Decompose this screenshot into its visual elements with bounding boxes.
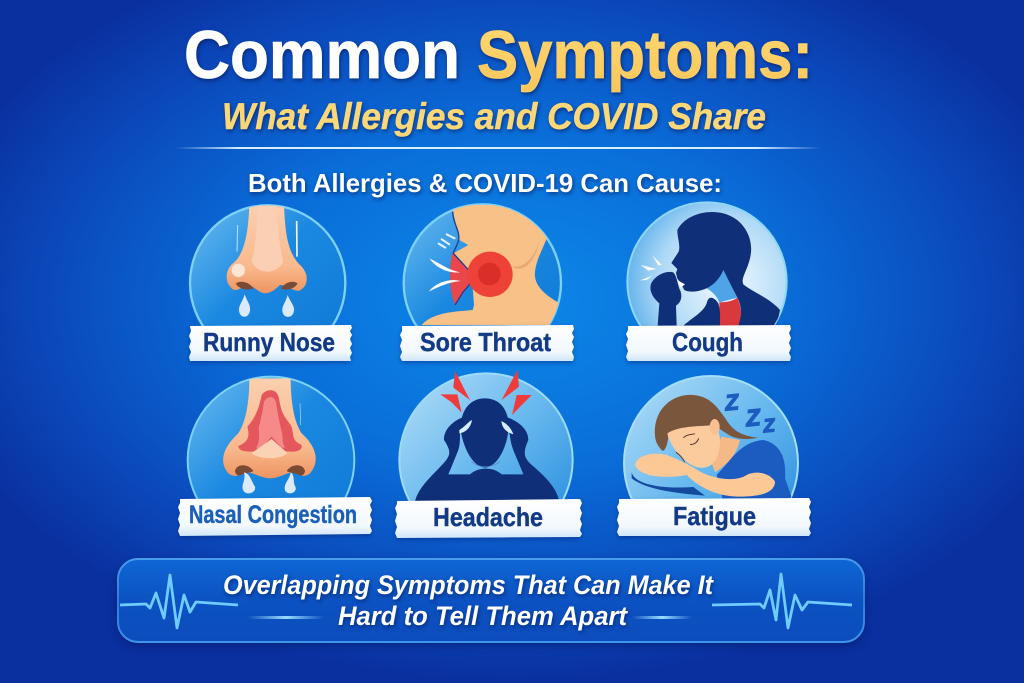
label banner: cough [626, 325, 791, 361]
label banner: sore throat [400, 325, 574, 361]
panel: nasal congestion [178, 377, 372, 543]
icon: nasal congestion [186, 376, 356, 499]
section heading: Both Allergies & COVID-19 Can Cause: [248, 168, 722, 198]
icon: cough [626, 201, 788, 326]
icon: headache [398, 370, 574, 501]
label banner: fatigue: Fatigue [673, 501, 756, 531]
panel: fatigue [617, 376, 811, 550]
icon: left pulse line [120, 575, 238, 628]
label banner: headache [395, 499, 582, 538]
label banner: nasal congestion: Nasal Congestion [189, 501, 357, 529]
label banner: runny nose: Runny Nose [203, 327, 335, 357]
callout text [223, 570, 714, 631]
label banner: headache: Headache [433, 502, 543, 532]
icon: pain bolts [440, 370, 532, 415]
callout panel [118, 559, 864, 642]
callout text: Overlapping Symptoms That Can Make It [223, 570, 714, 600]
divider line [175, 147, 821, 149]
label banner: sore throat: Sore Throat [420, 327, 551, 357]
icon: sore throat [402, 203, 562, 326]
icon: sleep letters [724, 393, 776, 434]
label banner: nasal congestion [178, 497, 372, 536]
icon: sleep letters: Z [744, 404, 762, 431]
icon: runny nose [188, 204, 346, 326]
panel: sore throat [400, 204, 574, 362]
panel: headache [395, 370, 582, 547]
icon: sleep letters: Z [761, 414, 776, 436]
panel: cough [626, 202, 791, 362]
title: Symptoms: [477, 17, 813, 93]
panel: runny nose [189, 205, 352, 361]
icon: fatigue [623, 375, 799, 499]
label banner: cough: Cough [672, 327, 743, 357]
callout text: Hard to Tell Them Apart [338, 601, 628, 631]
icon: right pulse line [712, 574, 852, 628]
title [184, 17, 813, 93]
subtitle: What Allergies and COVID Share [222, 96, 766, 137]
title: Common [184, 17, 460, 93]
icon: sleep letters: Z [723, 389, 741, 416]
label banner: fatigue [617, 498, 811, 536]
